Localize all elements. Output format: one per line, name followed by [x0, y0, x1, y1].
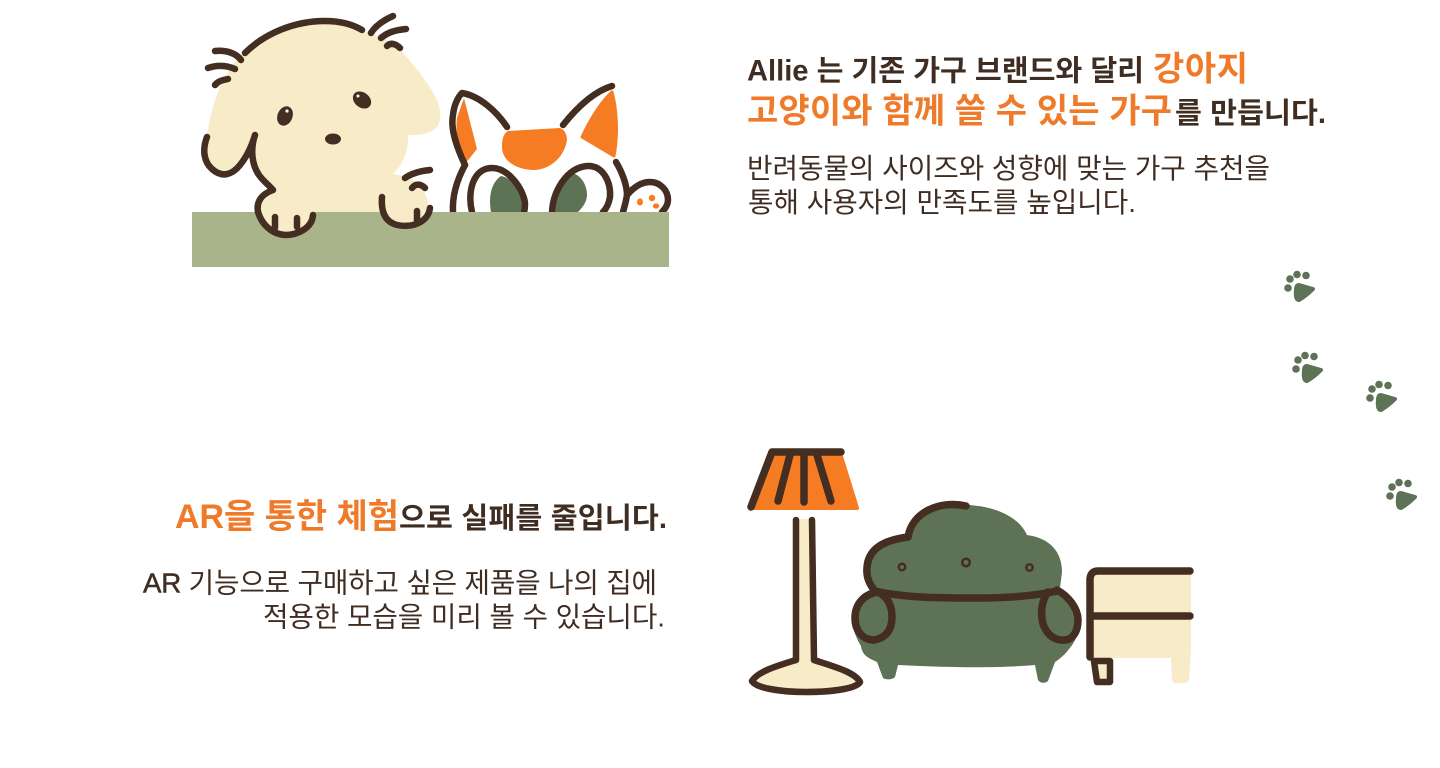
heading: Allie furniture: 고양이와 함께 쓸 수 있는 가구 [747, 92, 1172, 130]
body text: recommendation [747, 153, 1270, 218]
body text: AR feature: AR 기능으로 구매하고 싶은 제품을 나의 집에 [143, 568, 657, 598]
table [192, 212, 669, 267]
body text: AR feature [143, 568, 665, 632]
heading: AR experience [175, 498, 667, 536]
heading: Allie furniture: 강아지 [1153, 50, 1248, 88]
paw print 3 [1366, 381, 1395, 410]
heading: Allie furniture: 를 만듭니다. [1175, 97, 1326, 130]
illustration: dog and cat behind table [192, 16, 669, 267]
heading: AR experience: 으로 실패를 줄입니다. [399, 502, 667, 535]
dog [204, 16, 440, 232]
paw prints [1284, 271, 1415, 508]
paw print 1 [1284, 271, 1313, 300]
armchair [852, 504, 1080, 683]
illustration: furniture [751, 452, 1191, 692]
floor lamp [751, 452, 860, 692]
dog paws over table [258, 197, 430, 235]
heading: Allie furniture [747, 50, 1326, 130]
cat [452, 86, 668, 212]
body text: AR feature: 적용한 모습을 미리 볼 수 있습니다. [263, 602, 665, 632]
body text: recommendation: 반려동물의 사이즈와 성향에 맞는 가구 추천을 [747, 153, 1270, 184]
body text: recommendation: 통해 사용자의 만족도를 높입니다. [748, 187, 1136, 218]
paw print 2 [1292, 352, 1321, 381]
heading: Allie furniture: Allie 는 기존 가구 브랜드와 달리 [747, 54, 1144, 88]
side cabinet [1090, 571, 1191, 683]
heading: AR experience: AR을 통한 체험 [175, 498, 399, 536]
paw print 4 [1386, 479, 1415, 508]
